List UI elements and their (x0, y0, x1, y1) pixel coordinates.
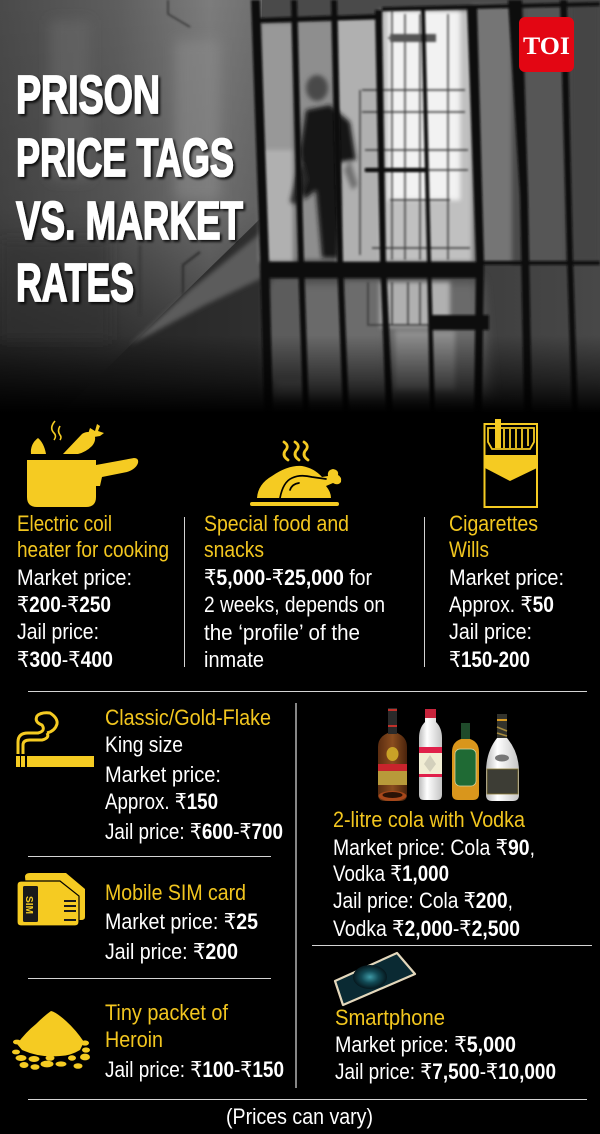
icon: four liquor bottles (378, 708, 519, 801)
text block: Jail price: ₹200 (105, 939, 238, 964)
text block: Approx. ₹50 (449, 592, 554, 617)
text block: heater for cooking (17, 537, 169, 562)
icon: roast chicken on platter (250, 442, 341, 506)
text block: Jail price: (17, 619, 99, 644)
text block: 2-litre cola with Vodka (333, 807, 526, 832)
panel: Classic/Gold-Flake (16, 705, 283, 844)
panel: 2-litre cola with Vodka (333, 708, 535, 941)
panel: special food and snacks (204, 442, 385, 672)
text block (17, 511, 169, 672)
bottom fade to black (0, 335, 600, 413)
text block: Jail price: ₹600-₹700 (105, 819, 283, 844)
text block: Special food and (204, 511, 349, 536)
panel: electric coil heater (17, 421, 169, 672)
silhouette figure (290, 75, 358, 258)
text block: ₹150-200 (449, 647, 530, 672)
text block: King size (105, 732, 183, 757)
text block: Smartphone (335, 1005, 445, 1030)
TOI logo (519, 17, 574, 72)
icon: smartphone (335, 953, 415, 1005)
icon: SIM cards (17, 873, 85, 926)
text block: Wills (449, 537, 489, 562)
text block: Heroin (105, 1027, 163, 1052)
text block: Mobile SIM card (105, 880, 246, 905)
text block: ₹5,000-₹25,000 for (204, 565, 372, 590)
icon: cigarette pack (484, 419, 537, 507)
jail bars (251, 0, 600, 414)
text block: Jail price: Cola ₹200, (333, 888, 513, 913)
text block (335, 1005, 556, 1084)
text block: Classic/Gold-Flake (105, 705, 271, 730)
text block: Vodka ₹1,000 (333, 861, 449, 886)
panel: tiny packet of Heroin (12, 1000, 284, 1082)
text block: Tiny packet of (105, 1000, 229, 1025)
title (16, 65, 243, 313)
text block: Vodka ₹2,000-₹2,500 (333, 916, 520, 941)
icon: heap of powder (12, 1011, 90, 1070)
photo: prison corridor with silhouette behind bars (0, 0, 600, 442)
text block (105, 1000, 284, 1082)
text block: snacks (204, 537, 264, 562)
text block (105, 705, 283, 844)
TOI logo: TOI (523, 33, 570, 60)
text block: Jail price: (449, 619, 532, 644)
text block: Jail price: ₹100-₹150 (105, 1057, 284, 1082)
panel: cigarettes Wills (449, 419, 564, 672)
text block: inmate (204, 647, 264, 672)
text block: the ‘profile’ of the (204, 620, 360, 645)
panel: Mobile SIM card (17, 873, 258, 964)
text block: Market price: (449, 565, 564, 590)
text block (449, 511, 564, 672)
icon: SIM cards: SIM (23, 896, 34, 914)
light panels (260, 0, 600, 390)
title: PRISON (16, 65, 160, 125)
footnote: (Prices can vary) (226, 1104, 373, 1129)
text block: Jail price: ₹7,500-₹10,000 (335, 1059, 556, 1084)
text block: Market price: (17, 565, 132, 590)
text block (333, 807, 535, 941)
floor (60, 217, 600, 414)
title: VS. MARKET (16, 191, 243, 251)
text block: 2 weeks, depends on (204, 592, 385, 617)
text block: ₹200-₹250 (17, 592, 111, 617)
inner window grille (360, 10, 470, 325)
panel: smartphone (335, 953, 556, 1084)
text block (204, 511, 385, 672)
text block: Electric coil (17, 511, 112, 536)
text block: Market price: ₹25 (105, 909, 258, 934)
icon: cooking pot with carrot (27, 421, 138, 507)
text block: Cigarettes (449, 511, 538, 536)
text block: ₹300-₹400 (17, 647, 113, 672)
text block: Market price: (105, 762, 221, 787)
icon: smoking cigarette (16, 713, 94, 767)
title: RATES (16, 253, 134, 313)
text block (105, 880, 258, 964)
text block: Approx. ₹150 (105, 789, 218, 814)
dividers (28, 517, 592, 1100)
text block: Market price: ₹5,000 (335, 1032, 516, 1057)
text block: Market price: Cola ₹90, (333, 835, 535, 860)
title: PRICE TAGS (16, 128, 234, 188)
